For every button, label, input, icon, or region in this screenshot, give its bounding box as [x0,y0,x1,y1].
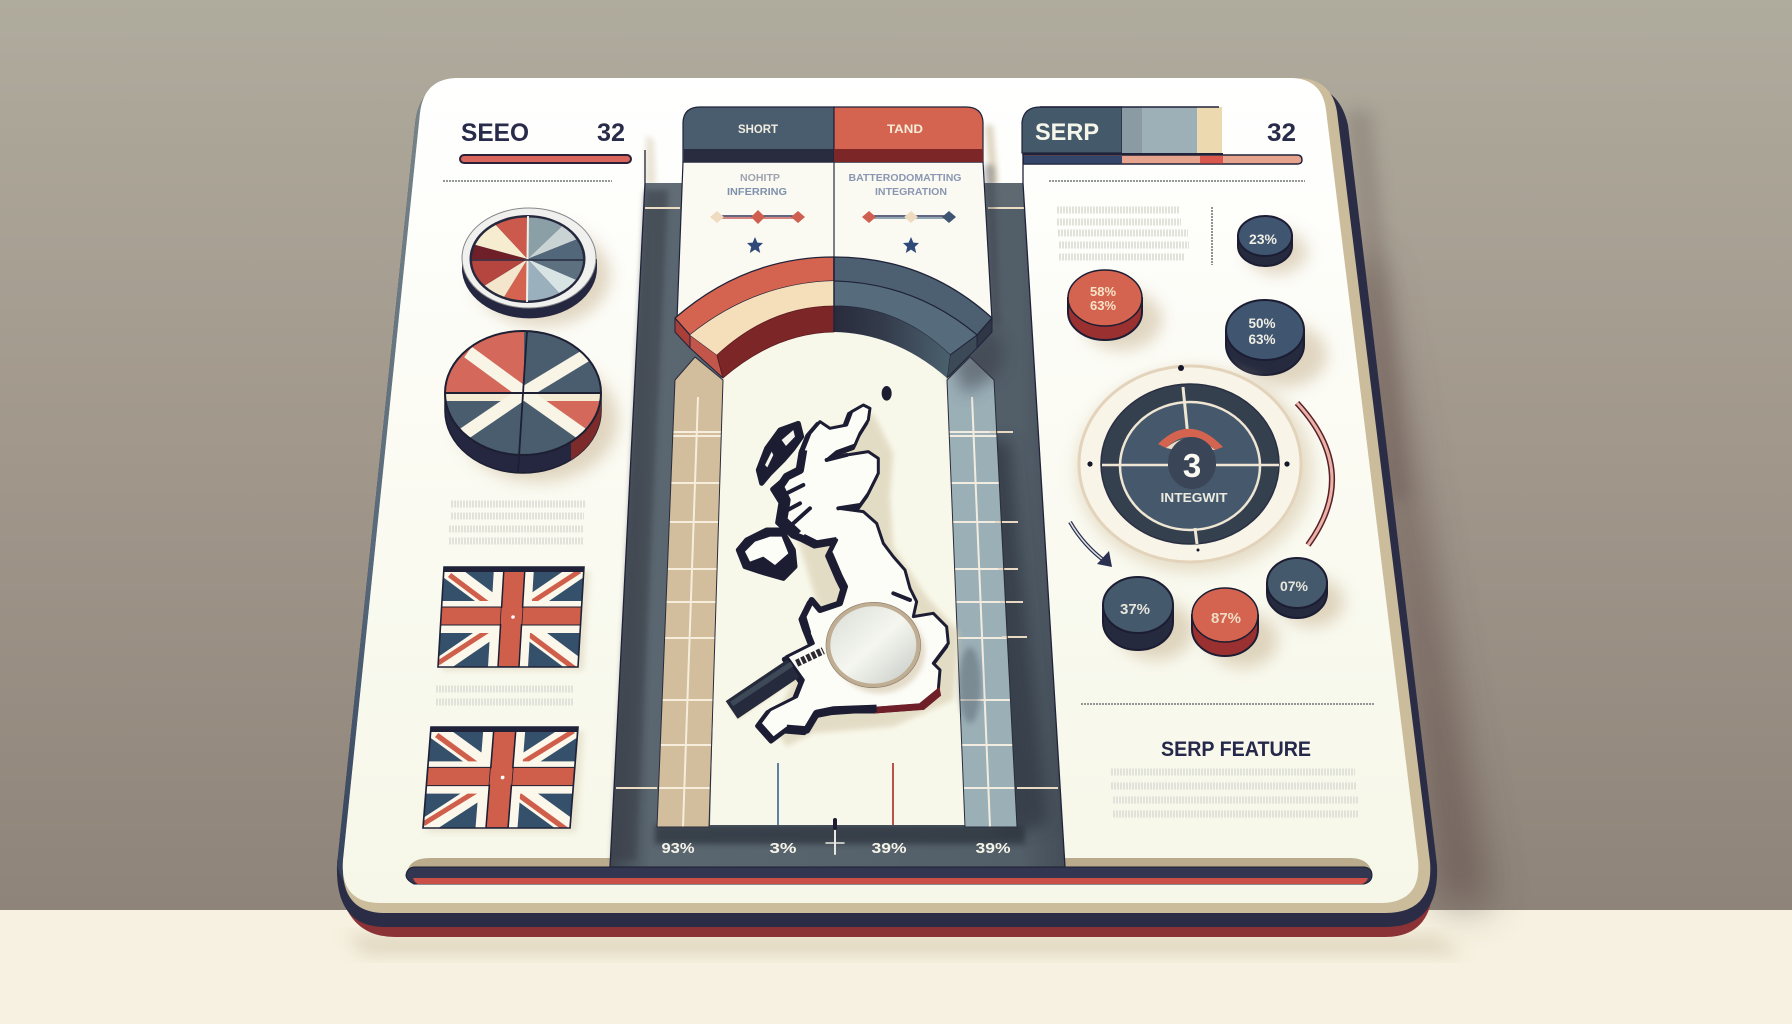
text: short description [727,172,787,198]
header: tail tab [834,107,983,162]
gauge number: 3 [1183,447,1201,484]
map: west coast detail [782,455,910,600]
text: short description: NOHITP [740,172,780,184]
icon: union flag one [438,567,590,671]
panel: right column header [1022,107,1302,164]
board [337,78,1437,937]
header: short tab: SHORT [738,124,778,136]
icon: large pie chart [440,325,618,482]
arch: segmented band [675,257,1005,395]
axis labels [662,840,1010,857]
button: 50% slate: 50% [1248,316,1276,331]
icon: magnifying glass [732,602,925,713]
icon: ring pie chart [462,208,610,326]
number: 32 left: 32 [597,119,625,147]
number: 32 right: 32 [1267,119,1296,147]
heading: SERP: SERP [1035,119,1099,146]
text block: flag caption placeholder [436,689,574,702]
header: short tab [683,107,834,162]
axis labels: 39% [976,840,1010,857]
text: short description: INFERRING [727,186,787,198]
gauge label: INTEGWIT [1160,490,1228,505]
panel: central tall sheet [710,325,965,825]
button: 07% slate [1267,558,1344,627]
slider: tail [862,211,956,223]
button: 58% coral [1068,270,1162,350]
header: tail tab: TAND [887,124,923,136]
button: 87% coral [1192,588,1278,668]
button: 58% coral: 63% [1090,298,1116,313]
button: 37% slate: 37% [1120,601,1150,618]
button: 87% coral: 87% [1211,610,1241,627]
axis labels: 39% [872,840,906,857]
text block: left placeholder lines [449,504,585,541]
button: 23%: 23% [1249,231,1278,247]
panel: dark central channel [610,183,1065,867]
icon: center cross mark [826,820,844,854]
panel: short and tail comparison card [677,107,1000,330]
text: tail description: INTEGRATION [875,186,947,198]
text: tail description: BATTERODOMATTING [848,172,962,184]
text: tail description [848,172,962,198]
progress bar left [460,155,631,163]
heading: SERP feature: SERP FEATURE [1161,738,1311,761]
map: Ireland [738,530,795,578]
axis labels: 93% [662,840,694,857]
button: 58% coral: 58% [1090,284,1116,299]
panel: left column header [460,119,631,163]
arrow: navy curved arrow [1070,522,1112,567]
button: 23% [1238,216,1307,274]
map: Orkney islet [882,386,892,401]
button: 37% slate [1103,577,1194,660]
text block: SERP feature placeholder lines [1111,772,1359,814]
tick: red marker [892,763,894,825]
chart: intent dial gauge [1077,365,1313,572]
panel: left tan scale strip [616,357,730,827]
icon: union flag two [423,727,584,832]
floor [0,910,1792,1024]
button: 07% slate: 07% [1280,578,1309,594]
heading: SEEO: SEEO [461,119,529,147]
slider: short [710,210,805,224]
arrow: red curved arc [1297,403,1332,545]
icon: star right [903,237,919,253]
panel: right blue-grey scale strip [940,357,1058,827]
tick: blue marker [777,763,779,825]
bottom bar [406,183,1372,884]
button: 50% slate: 63% [1248,332,1276,347]
map: United Kingdom with magnifying glass [732,386,960,747]
axis labels: 3% [770,840,796,857]
icon: star left [747,237,763,253]
map: Great Britain outline [758,405,948,741]
text block: right placeholder lines [1057,210,1189,257]
map: Hebrides island [758,423,802,483]
button: 50% slate [1226,300,1327,387]
